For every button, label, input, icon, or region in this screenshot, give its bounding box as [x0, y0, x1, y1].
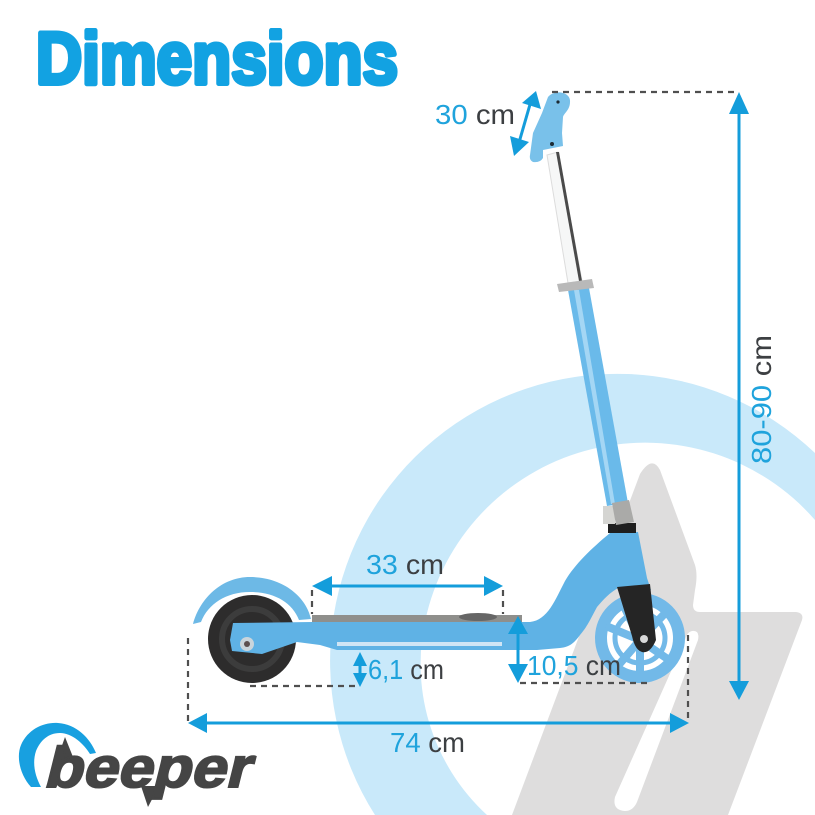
rear fender	[193, 577, 311, 624]
dimension arrow: 6,1 cm	[353, 652, 367, 687]
label: 74 cm: 74 cm	[390, 727, 465, 758]
rear wheel	[208, 595, 296, 683]
label: 6,1 cm: 6,1 cm	[368, 654, 444, 685]
stem collar	[557, 279, 594, 292]
front fork	[617, 584, 656, 652]
beeper logo	[19, 723, 262, 807]
folding clamp	[603, 500, 634, 525]
dimension arrow: 30 cm	[510, 91, 541, 156]
label: 10,5 cm: 10,5 cm	[527, 650, 621, 681]
label: 33 cm: 33 cm	[366, 549, 444, 580]
handlebar grip	[530, 92, 570, 162]
logo arc	[19, 723, 96, 787]
deck grip strip	[312, 613, 522, 624]
title: Dimensions	[36, 18, 398, 100]
dimension arrow: 80-90 cm	[729, 92, 749, 700]
black headset collar	[608, 523, 636, 533]
logo p spike	[141, 786, 159, 807]
dimension arrow: 74 cm	[188, 713, 689, 733]
steering tube highlight	[574, 290, 615, 504]
front wheel	[601, 599, 679, 677]
dashed guide lines	[188, 92, 738, 722]
label: 80-90 cm: 80-90 cm	[746, 335, 777, 464]
lower steering tube	[568, 288, 628, 506]
deck underside light strip	[337, 642, 502, 646]
deck and neck frame	[230, 532, 651, 654]
dimension arrow: 33 cm	[312, 576, 503, 596]
scooter illustration	[193, 92, 679, 683]
logo b spike	[54, 737, 73, 768]
background: grey bolt shape	[512, 463, 802, 815]
rear axle	[240, 637, 254, 651]
front axle	[640, 635, 648, 643]
background: light blue ring	[330, 374, 815, 815]
logo wordmark: beeper	[40, 737, 262, 800]
label: 30 cm: 30 cm	[435, 99, 515, 130]
chrome upper stem	[547, 152, 582, 283]
dimension arrow: 10,5 cm	[508, 616, 528, 683]
